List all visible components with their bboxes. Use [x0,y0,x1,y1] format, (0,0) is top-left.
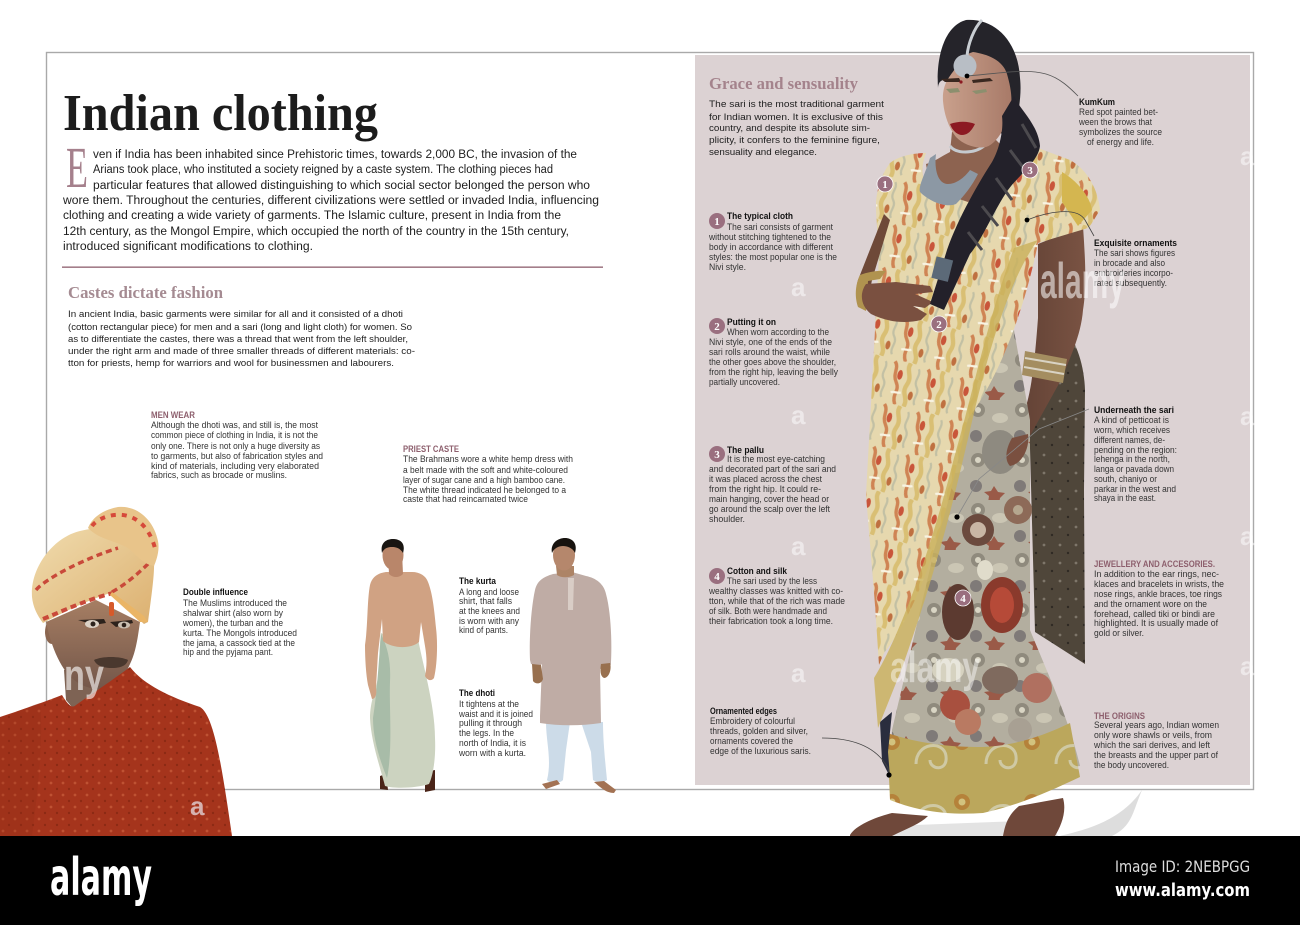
head [382,540,404,570]
text: the dhoti: north of India, it is [459,738,526,748]
text: 3 the pallu [709,445,836,524]
text: 3 the pallu: main hanging, cover the head or [709,494,829,504]
text: jewellery and accesories: forehead, called tiki or bindi are [1094,609,1215,619]
text: underneath the sari: parkar in the west and [1094,484,1176,494]
watermarks: a [1240,651,1255,681]
head [553,540,575,570]
lips [950,122,975,135]
intro text block [62,135,599,253]
intro text block: ven if India has been inhabited since Prehistoric times, towards 2,000 BC, the invasion of the [93,149,577,161]
text: jewellery and accesories: and the ornament wore on the [1094,599,1207,609]
panel: grace and sensuality [695,55,1250,785]
text: sari intro: sensuality and elegance. [709,147,817,158]
intro text block: particular features that allowed distinguishing to which social sector belonged the person who [93,180,590,192]
text: castes: In ancient India, basic garments were similar for all and it consisted of a dhoti [68,309,403,320]
watermarks: a [1240,401,1255,431]
text: the origins: THE ORIGINS [1094,711,1145,721]
text: castes: as to differentiate the castes, there was a thread that went from the left shoulder, [68,334,408,345]
sari pallu [866,148,1100,665]
torso and arms [365,572,437,699]
callout: exquisite ornaments [1027,212,1094,236]
eyebrows [941,78,993,83]
callout: kumkum [966,71,1078,96]
text: men wear: common piece of clothing in India, it is not the [151,430,318,440]
figure: man in kurta [530,538,616,793]
text: the origins [1093,711,1219,770]
text: the origins: the body uncovered. [1094,760,1169,770]
intro text block: 12th century, as the Mongol Empire, which occupied the north of the country in the 15th century, [63,226,569,238]
text: 1 the typical cloth: Nivi style. [709,262,746,272]
text: 1 the typical cloth [708,211,837,272]
hand on the skirt [1006,434,1028,466]
text: double influence: women), the turban and the [182,618,283,628]
text: exquisite ornaments: embroideries incorpo- [1094,268,1173,278]
text: sari intro: country, and despite its absolute sim- [709,123,870,134]
text: 3 the pallu: it was placed across the chest [709,474,822,484]
text: jewellery and accesories: klaces and bracelets in wrists, the [1094,579,1224,589]
heading: castes dictate fashion: Castes dictate fashion [68,283,224,302]
text: men wear: only one. There is not only a huge diversity as [151,441,320,451]
text: 2 putting it on: When worn according to the [727,327,829,337]
text: priest caste [403,444,573,504]
text: the dhoti: waist and it is joined [458,709,533,719]
text: the kurta: A long and loose [459,587,519,597]
text: ornamented edges: threads, golden and silver, [710,726,808,736]
face [46,600,140,689]
text: jewellery and accesories: JEWELLERY AND ACCESORIES. [1094,559,1215,569]
image id: Image ID: 2NEBPGG [1115,857,1250,876]
text: the dhoti: pulling it through [459,718,522,728]
text: 2 putting it on: sari rolls around the waist, while [709,347,830,357]
text: the dhoti: The dhoti [459,688,495,698]
hair [938,20,1021,136]
text: exquisite ornaments: The sari shows figures [1094,248,1175,258]
marker 3 [1022,162,1038,178]
text: 3 the pallu: from the right hip. It could re- [709,484,821,494]
bangles left [856,271,886,311]
text: kumkum: ween the brows that [1078,117,1152,127]
text: castes: tton for priests, hemp for warriors and wool for businessmen and labourers. [68,358,394,369]
watermarks: a [791,531,806,561]
watermarks: a [791,658,806,688]
title: Indian clothing [63,85,378,142]
text: the kurta: kind of pants. [459,625,508,635]
text: 2 putting it on: Putting it on [727,317,776,327]
text: 4 cotton and silk: 4 [714,571,720,583]
heading: grace and sensuality: Grace and sensuality [709,74,858,93]
floor shadow [1060,790,1142,836]
text: the dhoti: It tightens at the [459,699,519,709]
text: the origins: Several years ago, Indian women [1094,720,1219,730]
text: 2 putting it on: from the right hip, leaving the belly [709,367,838,377]
text: jewellery and accesories: gold or silver. [1094,628,1144,638]
text: double influence: Double influence [183,587,248,597]
text: men wear: fabrics, such as brocade or muslins. [151,470,287,480]
marker 4: 4 [960,593,966,605]
text: jewellery and accesories: In addition to the ear rings, nec- [1094,569,1219,579]
dhoti [370,633,435,788]
right arm [1008,226,1085,449]
text: the kurta: The kurta [459,576,497,586]
watermarks [64,141,1255,821]
text: the origins: which the sari derives, and left [1093,740,1210,750]
shoes [380,770,435,792]
text: underneath the sari [1093,405,1177,503]
text: kumkum: KumKum [1079,97,1115,107]
yellow band of the pallu [874,240,1038,728]
text: castes: (cotton rectangular piece) for men and a sari (long and light cloth) for women. So [68,322,412,333]
text: the kurta: shirt, that falls [459,596,512,606]
text: the kurta [459,576,520,635]
watermarks: a [190,791,205,821]
necklace [920,154,978,205]
marker 4 [955,590,971,606]
text: 3 the pallu: shoulder. [709,514,745,524]
neck [64,652,116,712]
text: men wear [151,410,323,480]
text: 3 the pallu: 3 [714,449,720,461]
text: ornamented edges: edge of the luxurious saris. [710,746,811,756]
text: priest caste: The Brahmans wore a white hemp dress with [403,454,573,464]
left arm [856,214,890,310]
text: 2 putting it on: Nivi style, one of the ends of the [709,337,832,347]
text: 4 cotton and silk: their fabrication took a long time. [709,616,833,626]
watermarks: a [791,272,806,302]
text: exquisite ornaments: rated subsequently. [1094,278,1167,288]
text: 4 cotton and silk: tton, while that of the rich was made [709,596,845,606]
text: the kurta: is worn with any [459,616,519,626]
watermarks: a [1240,521,1255,551]
text: 2 putting it on: the other goes above the shoulder, [709,357,836,367]
text: 4 cotton and silk: of silk. Both were handmade and [709,606,827,616]
text: underneath the sari: different names, de- [1094,435,1165,445]
marker 2: 2 [936,319,942,331]
text: exquisite ornaments [1094,238,1177,288]
text: 1 the typical cloth: The typical cloth [727,211,793,221]
kurta [530,572,611,725]
gold border [887,723,1080,814]
text: castes: under the right arm and made of three smaller threads of different materials: co- [68,346,415,357]
text: double influence: kurta. The Mongols introduced [183,628,297,638]
marker 1 [877,176,893,192]
turban [32,527,154,624]
text: exquisite ornaments: in brocade and also [1094,258,1165,268]
figure: woman in sari [822,20,1142,836]
text: 1 the typical cloth: The sari consists of garment [727,222,833,232]
text: ornamented edges: Embroidery of colourful [710,716,795,726]
text: underneath the sari: pending on the region: [1094,445,1177,455]
text: underneath the sari: lehenga in the north, [1094,454,1170,464]
text: underneath the sari: south, chaniyo or [1094,474,1157,484]
feet [542,780,616,793]
figure: man in dhoti [365,539,437,792]
text: kumkum: of energy and life. [1087,137,1154,147]
text: sari intro: The sari is the most traditional garment [709,99,884,110]
text: the dhoti [458,688,533,758]
text: the origins: the breasts and the upper part of [1094,750,1218,760]
marker 1: 1 [882,179,888,191]
figure: man with turban [0,507,232,836]
text: 4 cotton and silk: Cotton and silk [727,566,788,576]
text: priest caste: The white thread indicated he belonged to a [403,485,566,495]
website: www.alamy.com [1115,880,1250,901]
text: underneath the sari: langa or pavada down [1094,464,1174,474]
pants [546,722,607,783]
text: sari intro: for Indian women. It is exclusive of this [709,112,883,123]
marker 3: 3 [1027,165,1033,177]
text: underneath the sari: shaya in the east. [1094,493,1156,503]
text: castes [68,309,415,369]
footer bar [0,836,1300,925]
text: 4 cotton and silk [708,566,845,626]
braid [930,96,1040,310]
face [943,52,1011,148]
text: underneath the sari: Underneath the sari [1094,405,1174,415]
marker 2 [931,316,947,332]
text: 2 putting it on: 2 [714,321,720,333]
feet [850,798,1064,836]
text: double influence: shalwar shirt (also worn by [183,608,283,618]
skirt [890,330,1080,790]
text: the dhoti: worn with a kurta. [458,748,526,758]
text: double influence: hip and the pyjama pant. [183,647,273,657]
bangles [1022,351,1067,383]
text: men wear: kind of materials, including very elaborated [151,461,319,471]
text: sari intro [709,99,884,158]
text: underneath the sari: worn, which receives [1093,425,1170,435]
text: 4 cotton and silk: wealthy classes was knitted with co- [708,586,843,596]
text: 1 the typical cloth: body in accordance with different [709,242,833,252]
intro text block: Arians took place, who instituted a society reigned by a caste system. The clothing pieces had [93,164,553,176]
text: the dhoti: the legs. In the [459,728,514,738]
text: 1 the typical cloth: styles: the most popular one is the [709,252,837,262]
neck and chest [926,132,1010,202]
text: kumkum: symbolizes the source [1079,127,1162,137]
jacket [0,667,232,836]
intro text block: wore them. Throughout the centuries, different civilizations were settled or invaded India, influencing [62,195,599,207]
watermarks: alamy [890,643,980,692]
watermarks: ny [64,651,104,700]
text: ornamented edges: Ornamented edges [710,706,777,716]
text: double influence [182,587,297,657]
callout: underneath the sari [957,409,1089,517]
text: sari intro: plicity, it confers to the feminine figure, [709,135,880,146]
text: priest caste: PRIEST CASTE [403,444,459,454]
text: underneath the sari: A kind of petticoat is [1094,415,1169,425]
back shawl [1029,320,1085,664]
text: 3 the pallu: and decorated part of the sari and [709,464,836,474]
forehead jewel [967,20,982,56]
text: 1 the typical cloth: without stitching tightened to the [708,232,831,242]
intro text block: introduced significant modifications to clothing. [63,241,313,253]
ear [45,620,59,644]
watermarks: a [1240,141,1255,171]
text: double influence: The Muslims introduced the [183,598,287,608]
text: ornamented edges: ornaments covered the [710,736,793,746]
text: jewellery and accesories: highlighted. It is usually made of [1094,618,1218,628]
text: 1 the typical cloth: 1 [714,216,720,228]
dark edge of the pallu [880,712,892,777]
watermarks: a [791,400,806,430]
eyes [946,88,987,94]
text: 2 putting it on [709,317,838,387]
watermarks: alamy [1040,253,1125,309]
text: exquisite ornaments: Exquisite ornaments [1094,238,1177,248]
text: kumkum: Red spot painted bet- [1079,107,1158,117]
skirt motifs [932,430,1052,742]
drop cap: E [66,135,88,200]
text: men wear: MEN WEAR [151,410,195,420]
text: 4 cotton and silk: The sari used by the less [727,576,817,586]
fan of the turban [88,507,159,566]
text: the origins: only wore shawls or veils, from [1094,730,1212,740]
text: 3 the pallu: The pallu [727,445,764,455]
hands [532,663,611,683]
alamy logo: alamy [50,848,152,908]
text: 3 the pallu: go around the scalp over the left [709,504,830,514]
text: priest caste: a belt made with the soft and white-coloured [403,465,568,475]
text: jewellery and accesories: nose rings, ankle braces, toe rings [1094,589,1222,599]
text: priest caste: caste that had reincarnated twice [403,494,528,504]
text: men wear: to garments, but also of fabrication styles and [151,451,323,461]
text: the kurta: at the knees and [459,606,520,616]
text: jewellery and accesories [1094,559,1224,638]
callout: ornamented edges [822,738,889,775]
text: ornamented edges [710,706,811,756]
text: 2 putting it on: partially uncovered. [709,377,780,387]
text: 3 the pallu: It is the most eye-catching [727,454,825,464]
text: men wear: Although the dhoti was, and still is, the most [151,420,318,430]
page frame [46,52,1254,790]
left hand [862,282,933,322]
text: double influence: the jama, a cassock tied at the [183,638,295,648]
intro text block: clothing and creating a wide variety of garments. The Islamic culture, present in India from the [63,210,561,222]
text: priest caste: layer of sugar cane and a high bamboo cane. [403,475,565,485]
braid tie [931,256,953,282]
text: kumkum [1078,97,1162,147]
